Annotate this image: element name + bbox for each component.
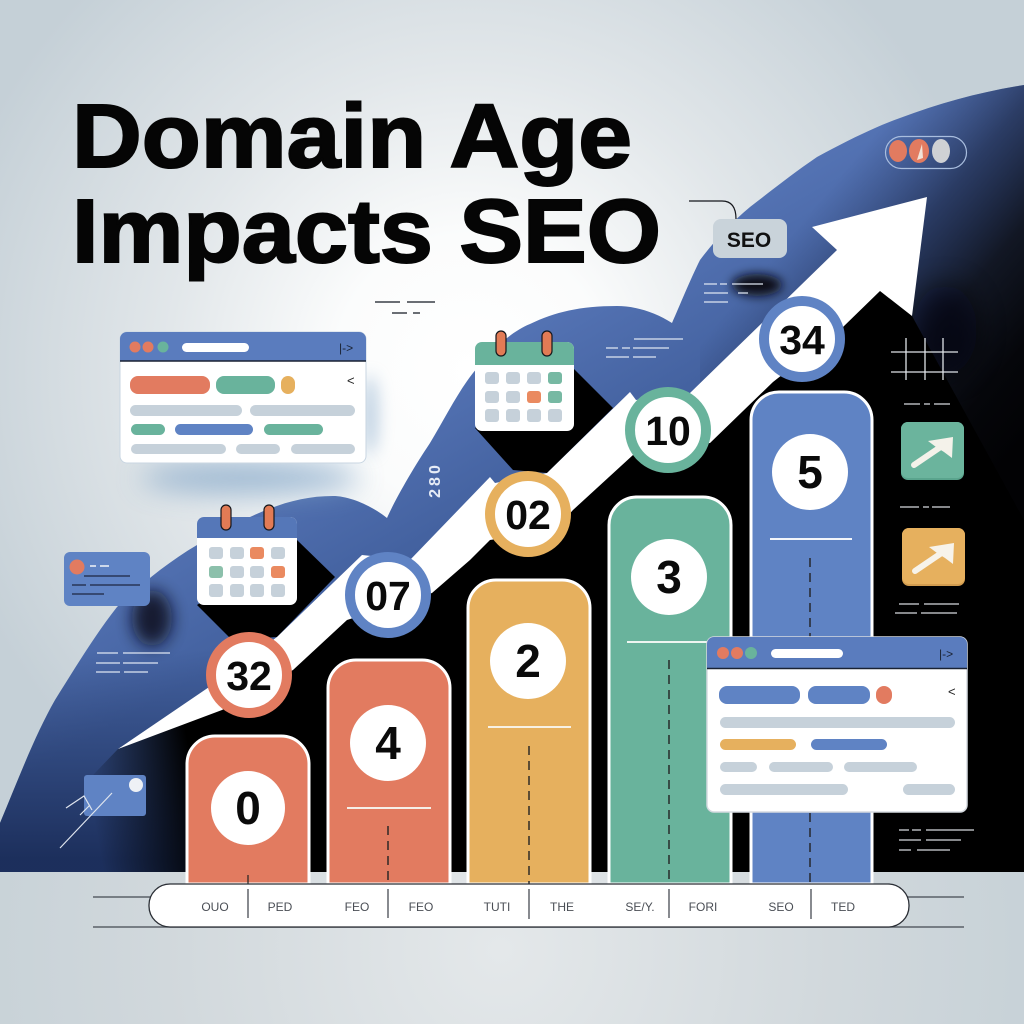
bar: 5: 5 [797,446,823,498]
rising hill backdrop [0,80,1024,872]
ring badge: 32: 32 [226,653,272,699]
timeline axis: FORI [689,900,717,914]
timeline axis: SE/Y. [625,900,655,914]
timeline axis: FEO [345,900,369,914]
dark panel note lines [895,404,974,850]
title [72,87,661,282]
ring badge: 32 [211,637,287,713]
timeline axis: THE [550,900,574,914]
title: Impacts SEO [72,182,661,282]
timeline axis: OUO [201,900,229,914]
timeline axis: SEO [768,900,794,914]
title: Domain Age [72,87,632,187]
timeline axis: PED [268,900,293,914]
browser window: top left: < [347,373,355,388]
bar: 4 [328,660,450,884]
ring badge: 34: 34 [779,317,825,363]
window shadow [140,375,378,493]
browser window: top left [120,332,366,463]
calendar: blue [197,505,297,605]
ring badge: 10: 10 [645,408,691,454]
bar: 2 [468,580,590,884]
timeline axis [93,884,964,927]
decorative note lines under title [375,302,435,313]
dark area under the arrow [0,285,1024,872]
bar: 4: 4 [375,717,401,769]
small card with pointer [60,775,146,848]
SEO tag [689,201,787,258]
bar: 2: 2 [515,635,541,687]
ring badge: 07 [350,557,426,633]
ring badge: 02: 02 [505,492,551,538]
SEO tag: SEO [727,229,771,252]
icon: yellow trend arrow tile [902,528,965,586]
grid glyph [891,338,958,380]
bar: 5 [751,392,872,884]
timeline axis: TUTI [484,900,510,914]
bar chart [187,392,872,884]
bar: 3 [609,497,731,884]
ring badge: 07: 07 [365,573,411,619]
bar: 0: 0 [235,782,261,834]
status pill icon [886,136,966,168]
floor [0,872,1024,1024]
calendar shadows [197,368,613,640]
calendar: green [475,331,574,431]
browser window: top left: |-> [339,341,353,355]
timeline axis: TED [831,900,855,914]
browser window: lower right [707,637,967,812]
rotated year label: 280 [427,462,444,498]
ring badge: 10 [630,392,706,468]
timeline axis: FEO [409,900,433,914]
growth arrow [118,197,927,749]
ring badge: 02 [490,476,566,552]
ring badge: 34 [764,301,840,377]
hill annotation lines [96,284,763,672]
icon: green trend arrow tile [901,422,964,480]
browser window: lower right: |-> [939,647,953,661]
bar: 3: 3 [656,551,682,603]
note card [64,552,150,606]
browser window: lower right: < [948,684,956,699]
bar: 0 [187,736,309,884]
